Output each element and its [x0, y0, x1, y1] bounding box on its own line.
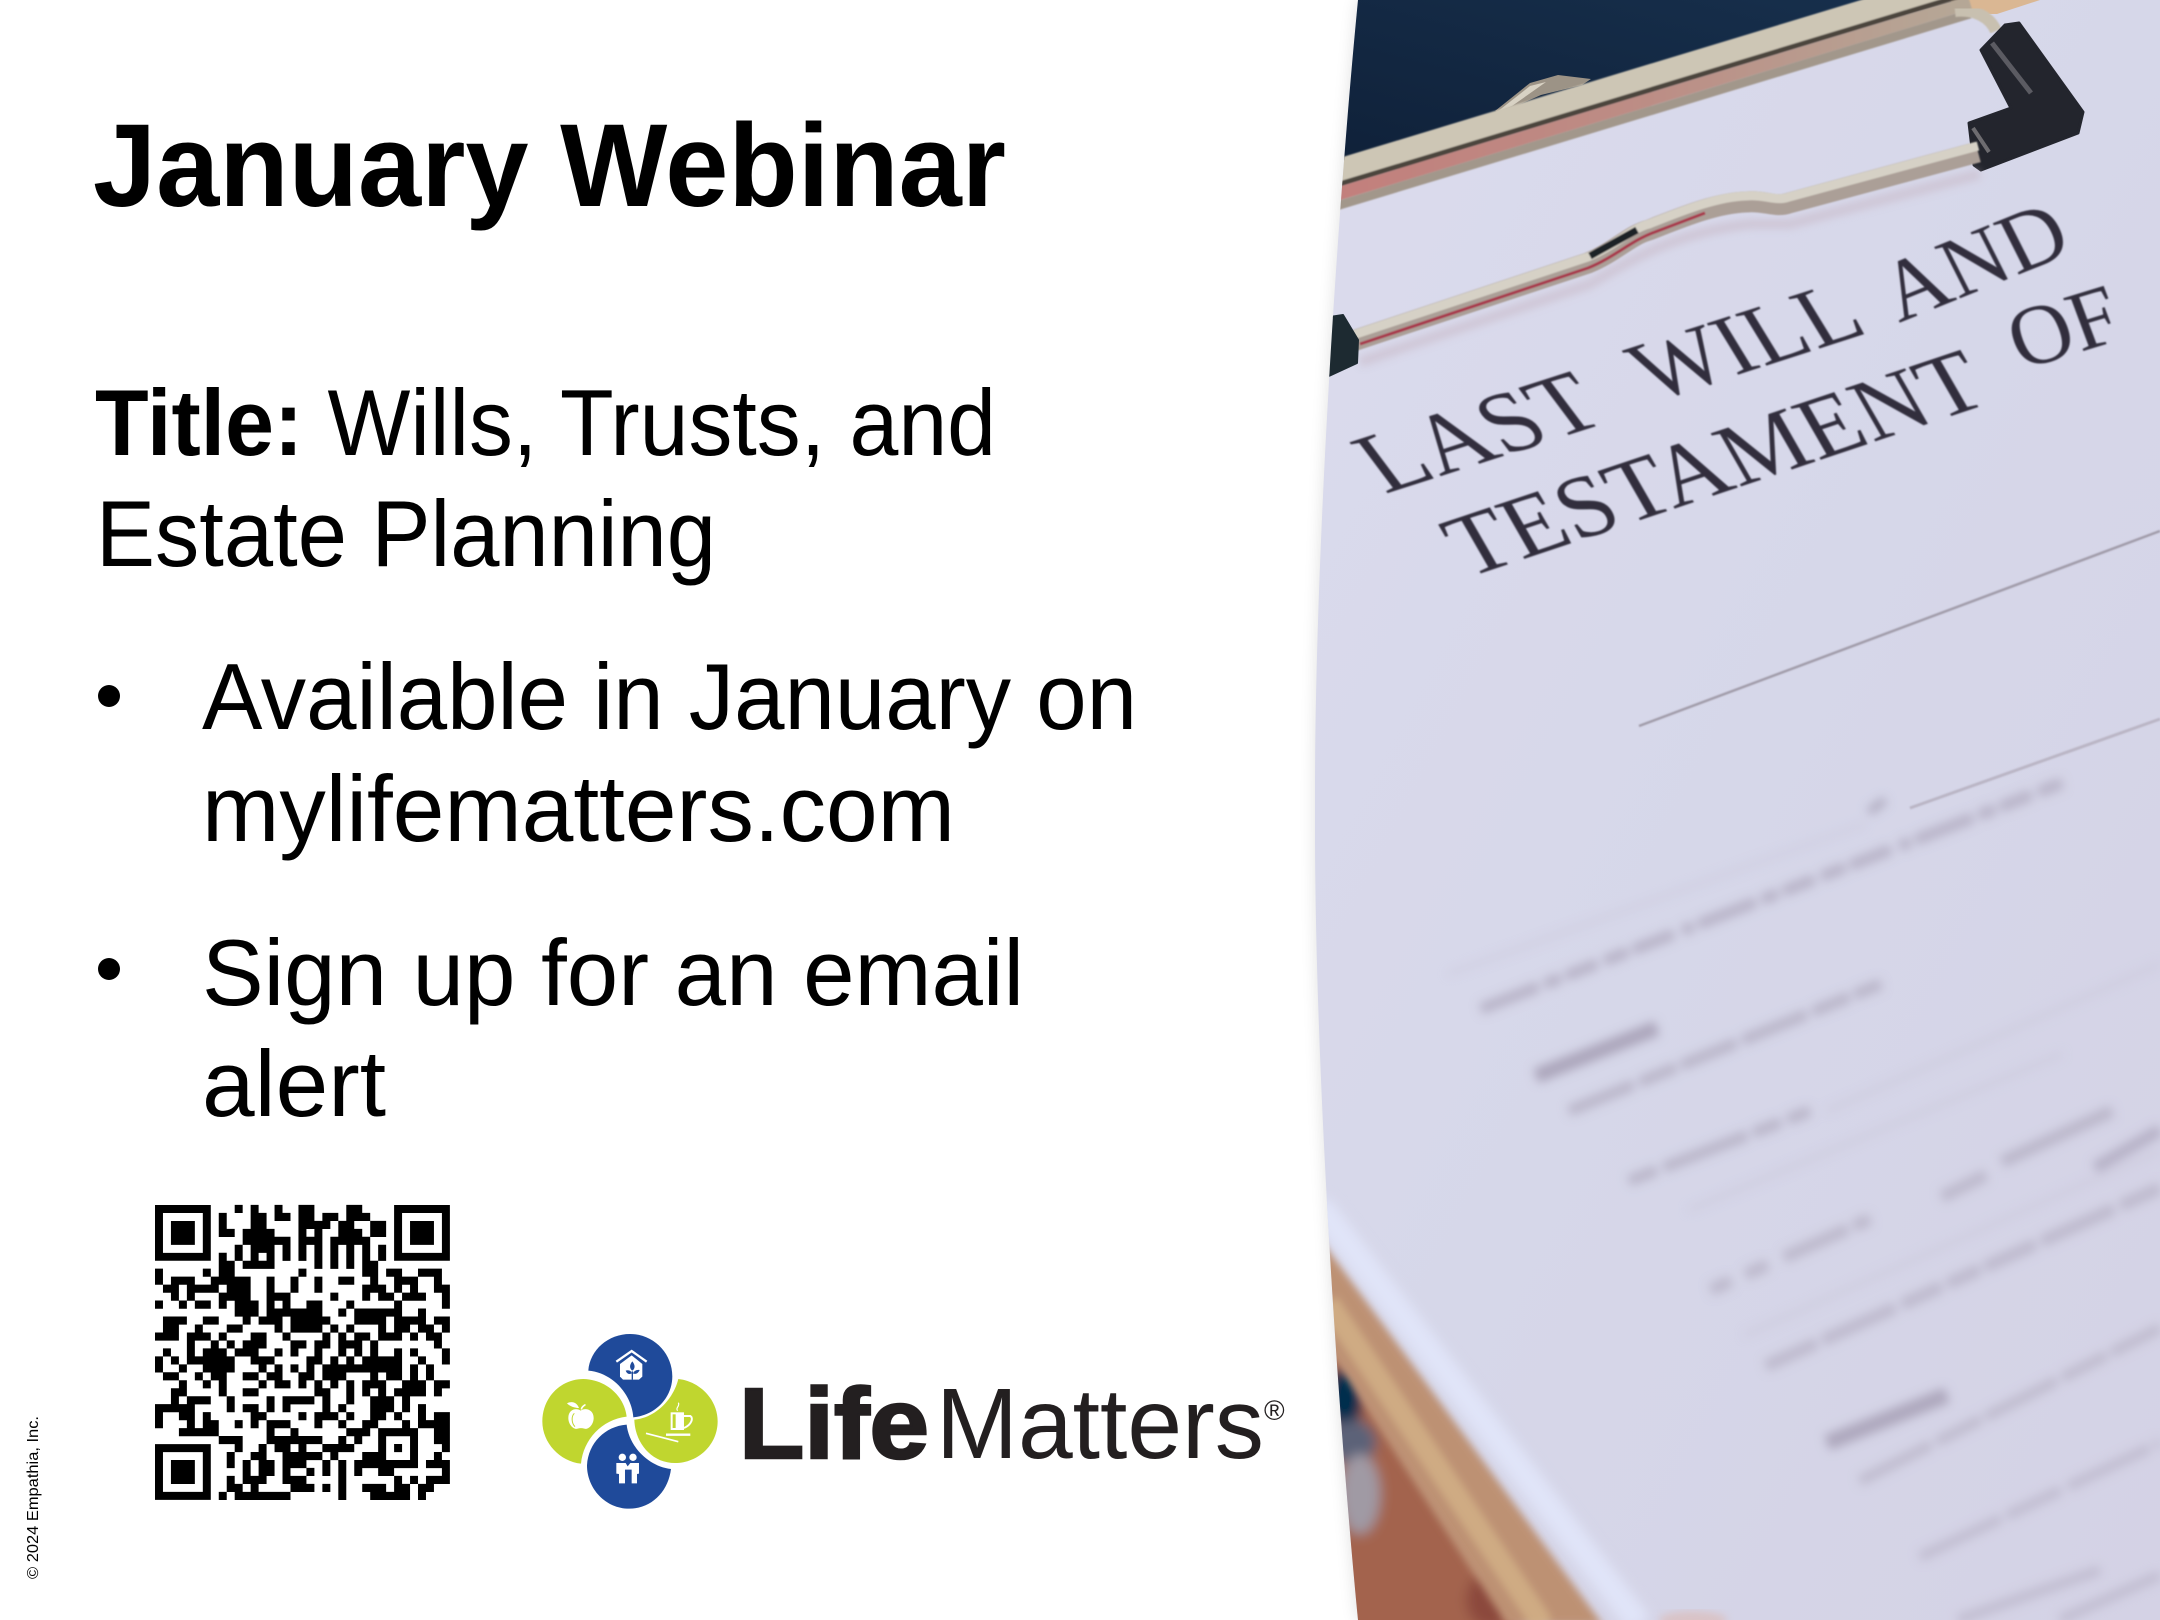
bullet: availability: mylifematters.com: [202, 756, 955, 861]
text block: webinar title: [95, 370, 996, 586]
blurred body text: [1448, 783, 2160, 1620]
black left end of wire: [1329, 314, 1359, 377]
tan clipboard corner: [1950, 0, 2040, 14]
signature lines: [1639, 531, 2160, 808]
clipboard edge and hand at lower left: [1290, 1205, 1727, 1620]
printed heading: AND: [1864, 183, 2084, 341]
photo: last will and testament on clipboard: [1290, 0, 2160, 1620]
text block: webinar title: Estate Planning: [96, 481, 716, 586]
clip connector: [1955, 11, 1996, 31]
clip hinge: [1495, 75, 1591, 113]
wire shadow: [1360, 174, 1980, 362]
title: January Webinar: [93, 100, 1006, 232]
printed heading: LAST: [1333, 353, 1622, 511]
printed heading: OF: [1994, 266, 2133, 388]
logo: LifeMatters: Matters: [936, 1368, 1264, 1480]
printed heading: TESTAMENT: [1426, 331, 2003, 596]
icon: house with plant: [616, 1351, 647, 1380]
icon: apple: [567, 1402, 594, 1429]
dark background behind clipboard: [1344, 0, 1951, 160]
bullet: email alert: [98, 920, 1024, 1136]
logo: LifeMatters: [542, 1334, 1285, 1509]
bullet: email alert: Sign up for an email: [202, 920, 1024, 1025]
bullet: availability: [98, 644, 1137, 861]
metal wire: [1350, 146, 1978, 344]
text block: webinar title: Title: Wills, Trusts, and: [95, 370, 996, 475]
icon: mug with saucer: [646, 1403, 692, 1442]
printed heading: [1348, 208, 2112, 574]
bullet: availability: Available in January on: [202, 644, 1137, 749]
logo wordmark: Life: [739, 1368, 929, 1480]
black corner piece: [1969, 23, 2083, 170]
logo emblem: [542, 1334, 718, 1509]
bullet: email alert: alert: [202, 1031, 386, 1136]
clipboard bar: [1340, 0, 1972, 210]
copyright note: © 2024 Empathia, Inc.: [25, 1416, 42, 1579]
icon: two people: [616, 1454, 639, 1483]
printed heading: WILL: [1610, 262, 1880, 419]
QR code: [155, 1205, 450, 1500]
logo: LifeMatters: ®: [1264, 1395, 1285, 1426]
